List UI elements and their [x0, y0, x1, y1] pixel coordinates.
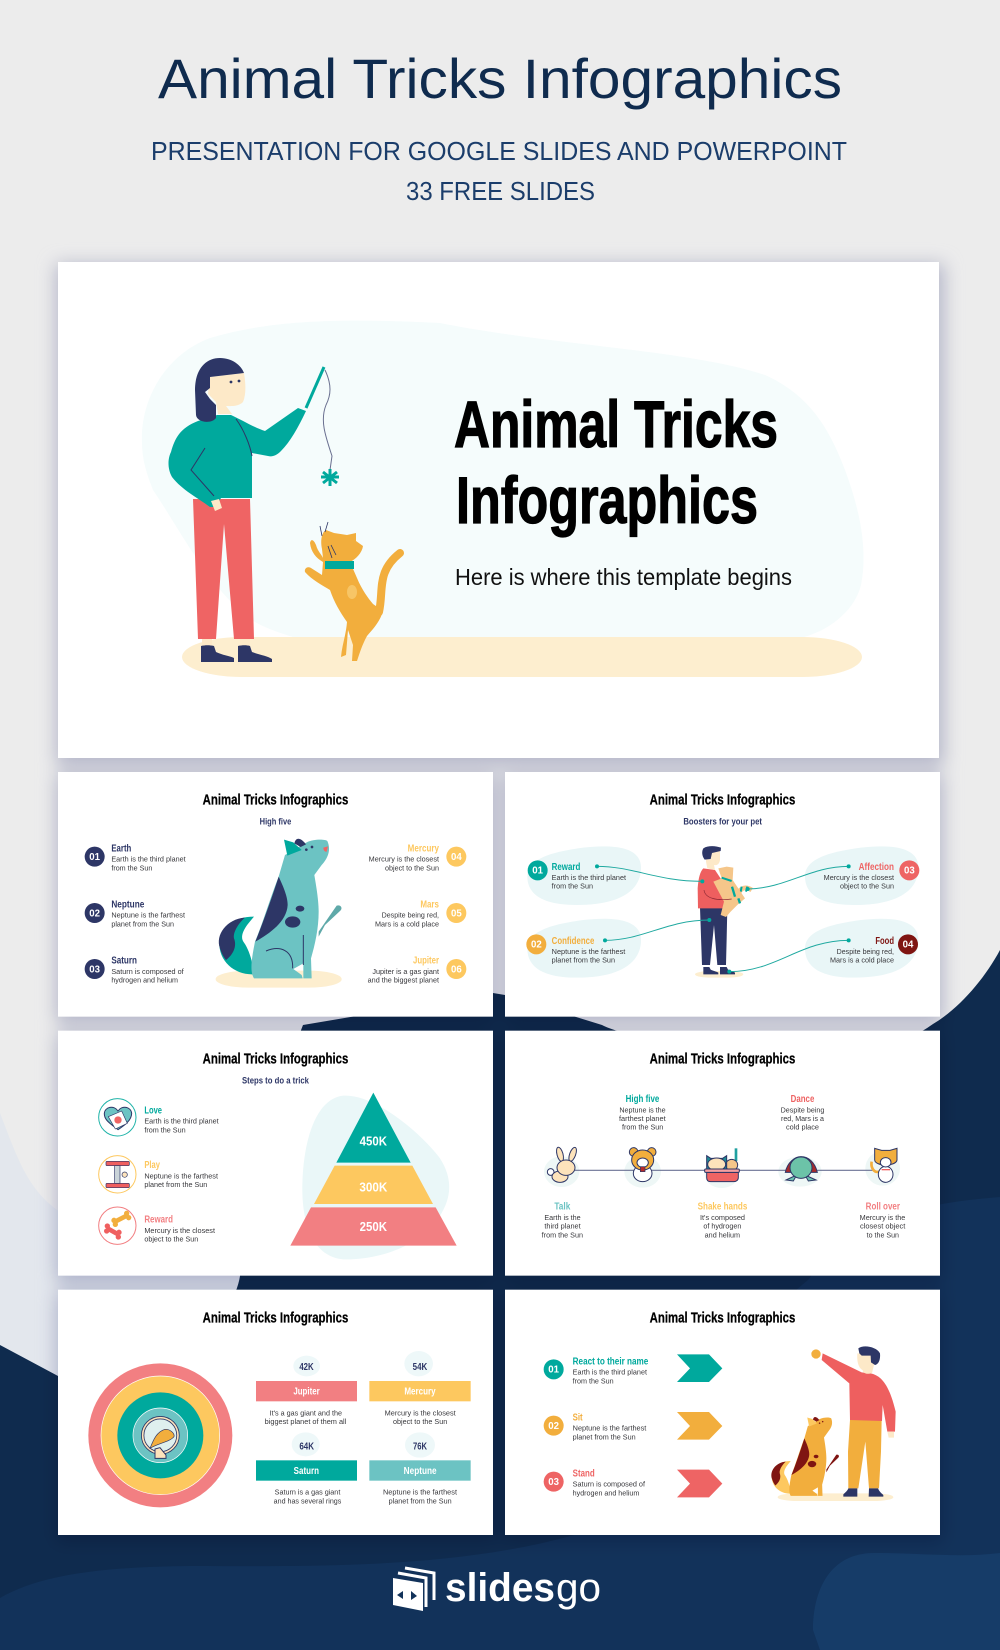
icon: cat in basket [705, 1148, 739, 1182]
heading: Animal Tricks Infographics [203, 1051, 348, 1067]
card: Saturn [256, 1441, 357, 1505]
heading: Animal Tricks Infographics [203, 792, 348, 808]
illustration: sitting dog [216, 839, 342, 988]
item: Food: 04 [903, 940, 914, 951]
item: High five: farthest planet [619, 1114, 666, 1123]
illustration: girl [168, 358, 339, 662]
item: Talk: Earth is the [544, 1213, 581, 1222]
background: pale wave [0, 1113, 300, 1380]
step: Stand: Saturn is composed of [573, 1480, 646, 1489]
item: Saturn: Saturn [111, 956, 137, 967]
item: Mars: Despite being red, [382, 911, 439, 920]
item: Neptune: Neptune [111, 900, 145, 911]
subtitle: PRESENTATION FOR GOOGLE SLIDES AND POWERPOINT [151, 136, 847, 166]
item: Earth: Earth [111, 844, 131, 855]
icon: cat [871, 1148, 897, 1182]
item: Saturn: Saturn is composed of [111, 967, 185, 976]
item: Jupiter: and the biggest planet [368, 976, 439, 985]
cover title line 2: Infographics [456, 463, 758, 537]
item: Reward [528, 860, 626, 891]
item: Confidence: Confidence [552, 936, 595, 947]
item: Mercury: object to the Sun [385, 863, 439, 872]
item: Reward: from the Sun [552, 882, 593, 891]
item: High five: from the Sun [622, 1123, 663, 1132]
illustration: cat [305, 522, 400, 661]
item: Saturn: 03 [89, 964, 101, 975]
dog [771, 1417, 839, 1496]
item: Confidence: 02 [531, 940, 542, 951]
cover subtitle: Here is where this template begins [455, 564, 792, 590]
item: Mercury [369, 844, 466, 872]
card: Neptune: Neptune [404, 1466, 437, 1477]
item: Reward: Earth is the third planet [552, 873, 626, 882]
card: Neptune [369, 1441, 471, 1505]
item: Mars: 05 [451, 908, 462, 919]
value blobs [292, 1351, 435, 1458]
card: Neptune: planet from the Sun [389, 1496, 452, 1505]
item: Shake hands [698, 1202, 748, 1239]
item: Jupiter [368, 956, 466, 985]
concentric ring chart [88, 1363, 232, 1507]
step: Reward: Reward [144, 1215, 173, 1226]
item: Confidence [526, 934, 625, 965]
step: Sit [544, 1412, 722, 1441]
pyramid chart: 250K [360, 1219, 387, 1234]
step: React to their name: 01 [548, 1365, 560, 1376]
blobs [527, 846, 918, 978]
card: Mercury: Mercury is the closest [385, 1408, 456, 1417]
step: Play [99, 1156, 218, 1193]
item: Food: Despite being red, [837, 947, 894, 956]
card: Mercury: object to the Sun [393, 1417, 447, 1426]
item: Saturn [85, 956, 185, 985]
item: Reward: Reward [552, 862, 580, 873]
item: Roll over: to the Sun [867, 1230, 899, 1239]
step: Reward [99, 1207, 215, 1244]
item: Roll over: closest object [860, 1222, 905, 1231]
item: Dance [781, 1094, 825, 1132]
heading: Animal Tricks Infographics [650, 792, 795, 808]
item: Earth [85, 844, 186, 872]
subheading: Boosters for your pet [683, 816, 762, 826]
item: Neptune: 02 [89, 908, 100, 919]
item: Neptune: planet from the Sun [111, 919, 174, 928]
card: Saturn: Saturn [294, 1466, 319, 1477]
step: Love: from the Sun [144, 1125, 186, 1134]
background: blue corner blob [813, 1553, 1000, 1650]
step: Stand: hydrogen and helium [573, 1488, 639, 1497]
step: Play: planet from the Sun [144, 1180, 207, 1189]
main title: Animal Tricks Infographics [158, 47, 842, 110]
subheading: High five [260, 816, 291, 826]
step: Stand [544, 1468, 722, 1497]
icon blobs [544, 1151, 900, 1188]
panel: steps to do a trick [58, 1031, 493, 1276]
panel: training steps [505, 1290, 940, 1535]
step: React to their name: React to their name [573, 1356, 649, 1367]
step: Sit: Sit [573, 1412, 583, 1423]
panel: cover slide [58, 262, 939, 758]
item: Affection: 03 [904, 866, 915, 877]
item: Neptune: Neptune is the farthest [111, 911, 185, 920]
card: Mercury: 54K [413, 1362, 428, 1373]
card: Jupiter: Jupiter [293, 1387, 320, 1398]
item: Mercury: Mercury [408, 844, 439, 855]
step: React to their name: from the Sun [573, 1376, 614, 1385]
step: Reward: Mercury is the closest [144, 1226, 215, 1235]
card: Jupiter: 42K [299, 1362, 314, 1373]
item: Mercury: Mercury is the closest [369, 855, 439, 864]
item: Shake hands: It's composed [700, 1213, 745, 1222]
heading: Animal Tricks Infographics [203, 1310, 348, 1326]
item: Affection [824, 860, 919, 891]
icon: stacked slides [393, 1568, 434, 1611]
card: Mercury [369, 1362, 471, 1426]
step: Love: Love [144, 1105, 162, 1116]
item: Affection: Mercury is the closest [824, 873, 894, 882]
item: Talk: Talk [554, 1202, 571, 1213]
heading: Animal Tricks Infographics [650, 1310, 795, 1326]
item: Shake hands: of hydrogen [703, 1222, 741, 1231]
item: Earth: 01 [89, 852, 101, 863]
item: Shake hands: and helium [705, 1230, 740, 1239]
item: Confidence: Neptune is the farthest [552, 947, 625, 956]
card: Neptune: Neptune is the farthest [383, 1488, 457, 1497]
item: High five: Neptune is the [619, 1105, 666, 1114]
item: Roll over: Mercury is the [860, 1213, 905, 1222]
cover title: Animal Tricks [454, 387, 778, 461]
background: navy wave [0, 950, 1000, 1650]
item: Food [830, 934, 918, 965]
item: High five [619, 1094, 666, 1132]
card: Jupiter: biggest planet of them all [265, 1417, 347, 1426]
subtitle: 33 FREE SLIDES [406, 176, 595, 206]
item: Talk: from the Sun [542, 1230, 583, 1239]
item: Shake hands: Shake hands [698, 1202, 748, 1213]
card: Saturn: Saturn is a gas giant [275, 1488, 340, 1497]
heading: Animal Tricks Infographics [650, 1051, 795, 1067]
item: Jupiter: Jupiter [413, 956, 439, 967]
item: Food: Mars is a cold place [830, 956, 894, 965]
item: Confidence: planet from the Sun [552, 956, 615, 965]
item: Mars: Mars [420, 900, 439, 911]
step: React to their name [544, 1354, 722, 1385]
item: Jupiter: Jupiter is a gas giant [372, 967, 439, 976]
card: Jupiter: It's a gas giant and the [270, 1408, 342, 1417]
item: Mars: Mars is a cold place [375, 919, 439, 928]
item: Neptune [85, 900, 185, 928]
item: High five: High five [626, 1094, 660, 1105]
panel: boosters for your pet [505, 772, 940, 1017]
pyramid chart: 450K [360, 1134, 387, 1149]
item: Affection: Affection [859, 862, 894, 873]
card: Mercury: Mercury [404, 1387, 436, 1398]
illustration: man and dog [771, 1346, 896, 1501]
card: Saturn: 64K [299, 1441, 315, 1452]
pyramid chart [290, 1093, 457, 1259]
card: Neptune: 76K [413, 1441, 428, 1452]
item: Food: Food [875, 936, 894, 947]
item: Dance: Despite being [781, 1105, 824, 1114]
panel: planet rings [58, 1290, 493, 1535]
subheading: Steps to do a trick [242, 1075, 310, 1085]
card: Saturn: and has several rings [274, 1496, 342, 1505]
step: Stand: Stand [573, 1468, 595, 1479]
ground [182, 637, 862, 677]
step: React to their name: Earth is the third planet [573, 1368, 647, 1377]
step: Sit: Neptune is the farthest [573, 1424, 646, 1433]
illustration: man holding cat [695, 846, 752, 978]
icon: hamster [629, 1148, 656, 1182]
panel: timeline of tricks [505, 1031, 940, 1276]
timeline line [575, 1169, 873, 1172]
background: lighter navy wave [0, 1197, 1000, 1650]
item: Earth: from the Sun [111, 863, 152, 872]
step: Sit: 02 [548, 1421, 559, 1432]
item: Mars [375, 900, 466, 928]
item: Reward: 01 [532, 866, 544, 877]
wordmark: slides [445, 1566, 555, 1610]
pyramid chart: 300K [359, 1179, 388, 1194]
icon: turtle [785, 1157, 817, 1181]
item: Mercury: 04 [451, 852, 462, 863]
item: Dance: red, Mars is a [781, 1114, 825, 1123]
item: Talk: third planet [544, 1222, 581, 1231]
item: Roll over: Roll over [866, 1202, 900, 1213]
logo: slidesgo: go [556, 1566, 601, 1610]
subtitle [151, 136, 847, 206]
item: Earth: Earth is the third planet [111, 855, 186, 864]
card: Jupiter [256, 1362, 357, 1426]
item: Dance: cold place [786, 1123, 819, 1132]
step: Love: Earth is the third planet [144, 1117, 219, 1126]
item: Roll over [860, 1202, 905, 1239]
icon: rabbit [547, 1146, 578, 1182]
panel: high five [58, 772, 493, 1017]
step: Love [99, 1099, 219, 1136]
step: Play: Play [144, 1160, 160, 1171]
blob backdrop [142, 321, 864, 637]
step: Reward: object to the Sun [144, 1235, 198, 1244]
logo: slidesgo [393, 1566, 601, 1611]
connector lines [595, 864, 851, 974]
step: Stand: 03 [548, 1477, 560, 1488]
item: Talk [542, 1202, 583, 1239]
item: Saturn: hydrogen and helium [111, 976, 178, 985]
item: Affection: object to the Sun [840, 882, 894, 891]
step: Play: Neptune is the farthest [144, 1171, 218, 1180]
step: Sit: planet from the Sun [573, 1432, 636, 1441]
item: Dance: Dance [791, 1094, 815, 1105]
item: Jupiter: 06 [451, 964, 462, 975]
